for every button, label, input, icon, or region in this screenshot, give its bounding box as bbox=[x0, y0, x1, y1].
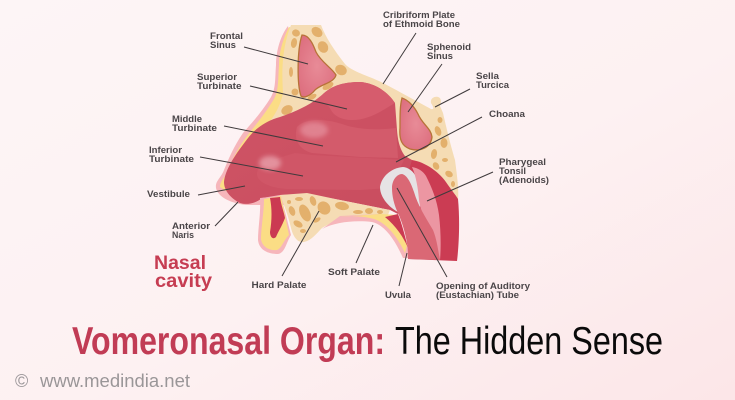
label: Hard Palate: Hard Palate bbox=[252, 280, 306, 291]
label: Sphenoid Sinus bbox=[427, 42, 471, 62]
hard palate bone bbox=[280, 193, 390, 242]
superior turbinate bbox=[313, 82, 395, 120]
yellow fat layer bbox=[220, 27, 300, 200]
bone spots bbox=[280, 25, 455, 187]
soft palate dark tissue bbox=[385, 214, 408, 248]
label: Middle Turbinate: Turbinate bbox=[172, 123, 217, 134]
label: Opening of Auditory (Eustachian) Tube: (Eustachian) Tube bbox=[436, 290, 519, 301]
label: Sphenoid Sinus: Sphenoid bbox=[427, 42, 471, 53]
label: Superior Turbinate: Superior bbox=[197, 72, 237, 83]
label: Opening of Auditory (Eustachian) Tube bbox=[436, 281, 531, 301]
middle turbinate highlight bbox=[300, 122, 328, 138]
nostril flap red bbox=[270, 197, 285, 238]
label: Anterior Naris bbox=[172, 221, 210, 241]
label: Opening of Auditory (Eustachian) Tube: Opening of Auditory bbox=[436, 281, 531, 292]
label: Cribriform Plate of Ethmoid Bone: of Ethmoid Bone bbox=[383, 19, 460, 30]
inferior turbinate highlight bbox=[259, 156, 281, 170]
adenoid tissue bbox=[412, 167, 441, 260]
label: Soft Palate: Soft Palate bbox=[328, 267, 380, 278]
sphenoid sinus bbox=[400, 98, 432, 150]
label: Nasal cavity: cavity bbox=[155, 271, 212, 292]
label: Frontal Sinus: Sinus bbox=[210, 40, 236, 51]
label: Cribriform Plate of Ethmoid Bone: Cribriform Plate bbox=[383, 10, 455, 21]
soft palate outline bbox=[322, 214, 408, 258]
label: Sella Turcica: Turcica bbox=[476, 80, 510, 91]
label: Frontal Sinus bbox=[210, 31, 243, 51]
label: Pharygeal Tonsil (Adenoids): (Adenoids) bbox=[499, 175, 549, 186]
copyright: www.medindia.net: © bbox=[15, 371, 28, 391]
label: Anterior Naris: Naris bbox=[172, 230, 194, 241]
label: Superior Turbinate bbox=[197, 72, 242, 92]
frontal sinus bbox=[298, 35, 336, 97]
main nasal cavity bbox=[224, 82, 425, 214]
label: Sella Turcica: Sella bbox=[476, 71, 500, 82]
nostril flap yellow bbox=[261, 196, 289, 250]
white ring cartilage bbox=[380, 167, 422, 212]
title: The Hidden Sense bbox=[395, 320, 663, 363]
label: Anterior Naris: Anterior bbox=[172, 221, 210, 232]
label: Middle Turbinate bbox=[172, 114, 217, 134]
label: Uvula: Uvula bbox=[385, 290, 412, 301]
copyright: www.medindia.net: www.medindia.net bbox=[39, 371, 190, 391]
label: Inferior Turbinate: Inferior bbox=[149, 145, 182, 156]
middle turbinate bbox=[296, 120, 398, 158]
label: Choana: Choana bbox=[489, 109, 526, 120]
palate bone spots bbox=[287, 195, 383, 233]
inferior turbinate bbox=[257, 153, 404, 190]
soft palate yellow bbox=[340, 214, 407, 253]
label: Nasal cavity bbox=[154, 253, 212, 292]
label: Pharygeal Tonsil (Adenoids): Pharygeal bbox=[499, 157, 546, 168]
label: Sella Turcica bbox=[476, 71, 510, 91]
label: Pharygeal Tonsil (Adenoids) bbox=[499, 157, 549, 186]
title bbox=[72, 320, 663, 363]
auditory tube bbox=[392, 174, 440, 260]
throat wall bbox=[400, 160, 459, 261]
label: Sphenoid Sinus: Sinus bbox=[427, 51, 453, 62]
label: Frontal Sinus: Frontal bbox=[210, 31, 243, 42]
nasal cavity anatomy diagram bbox=[198, 25, 493, 286]
leader lines bbox=[198, 33, 493, 286]
label: Nasal cavity: Nasal bbox=[154, 253, 206, 274]
label: Middle Turbinate: Middle bbox=[172, 114, 202, 125]
label: Inferior Turbinate bbox=[149, 145, 194, 165]
label: Pharygeal Tonsil (Adenoids): Tonsil bbox=[499, 166, 526, 177]
label: Cribriform Plate of Ethmoid Bone bbox=[383, 10, 460, 30]
title: Vomeronasal Organ: bbox=[72, 320, 385, 363]
label: Vestibule: Vestibule bbox=[147, 189, 190, 200]
nostril flap bbox=[258, 196, 291, 254]
label: Inferior Turbinate: Turbinate bbox=[149, 154, 194, 165]
outer skin bbox=[216, 26, 300, 205]
ethmoid and sphenoid bone bbox=[264, 25, 458, 199]
label: Superior Turbinate: Turbinate bbox=[197, 81, 242, 92]
